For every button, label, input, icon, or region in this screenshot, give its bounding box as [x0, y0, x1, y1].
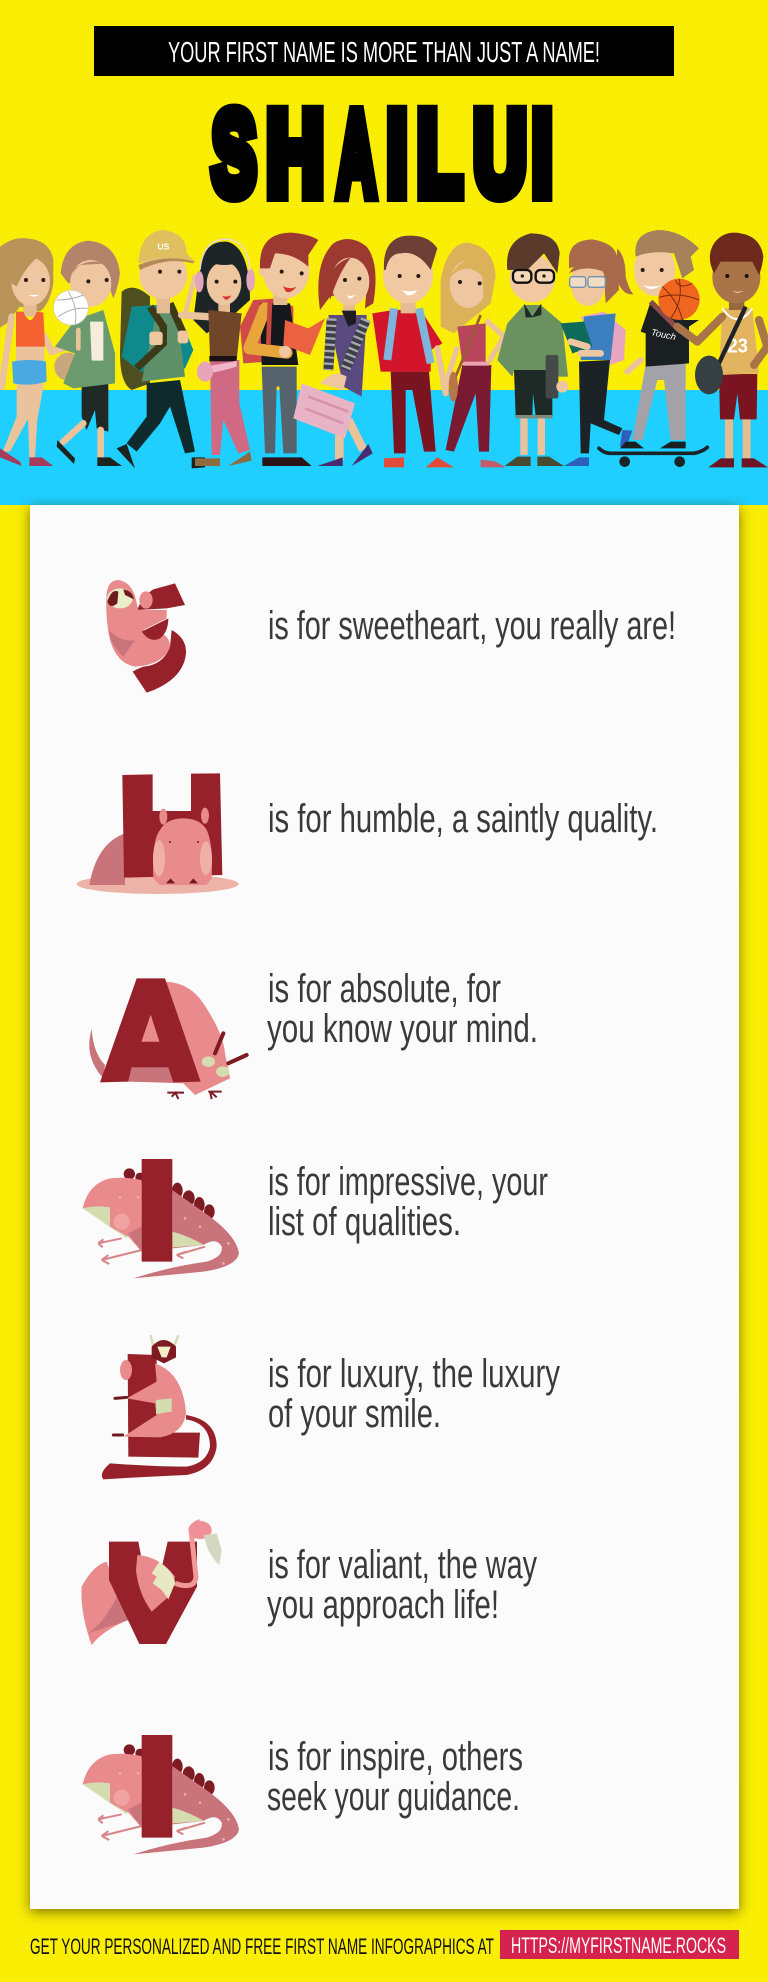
character: boy in red shirt — [372, 236, 454, 467]
icon: iguana on second letter I — [83, 1735, 239, 1854]
top banner — [94, 26, 674, 76]
group of characters, right half — [372, 230, 768, 467]
title: name: S — [212, 87, 256, 219]
text: second I lines: is for inspire, others — [268, 1735, 523, 1779]
character: skater with basketball — [599, 230, 707, 467]
character: girl with pink bag — [293, 239, 376, 466]
character: girl with pink backpack and tablet — [561, 239, 633, 466]
icon: sloth on letter S — [106, 580, 186, 693]
character: hiker with backpack and cap — [117, 230, 205, 468]
group of characters, left half — [0, 230, 376, 468]
text: L lines: is for luxury, the luxury — [268, 1352, 560, 1396]
panel: letter V row — [81, 1521, 537, 1645]
panel: second letter I row — [83, 1735, 523, 1854]
character: girl in orange top — [0, 238, 78, 466]
text: I lines: is for impressive, your — [268, 1160, 548, 1204]
text: L lines — [268, 1352, 560, 1436]
icon: armadillo on letter A — [89, 978, 247, 1099]
icon: hippo on letter H — [77, 773, 239, 894]
character: girl with volleyball and green jacket — [54, 241, 122, 466]
title: name: H — [267, 87, 324, 219]
title: name: L — [417, 87, 462, 219]
character: boy with basketball jersey and shoulder bag — [658, 233, 768, 467]
icon: flamingo on letter V — [81, 1521, 222, 1645]
text: second I lines: seek your guidance. — [267, 1775, 520, 1819]
panel: letter L row — [102, 1335, 560, 1479]
character: hiker with backpack and cap: US — [157, 241, 170, 251]
title: name — [212, 87, 552, 219]
title: name: I — [532, 87, 552, 219]
icon: monkey on letter L — [102, 1335, 217, 1479]
footer call to action: GET YOUR PERSONALIZED AND FREE FIRST NAME INFOGRAPHICS AT — [30, 1934, 494, 1959]
title: name: A — [337, 87, 376, 219]
text: V lines — [267, 1543, 537, 1627]
title: name: I — [387, 87, 407, 219]
icon: iguana on letter I — [83, 1159, 239, 1278]
character: blonde girl with maroon trousers — [441, 243, 506, 467]
character: boy with glasses and green sweater — [497, 233, 568, 466]
text: V lines: you approach life! — [267, 1583, 499, 1627]
title: name: U — [474, 87, 527, 219]
text: A lines: is for absolute, for — [268, 967, 501, 1011]
text: A lines: you know your mind. — [267, 1007, 538, 1051]
text: L lines: of your smile. — [268, 1392, 441, 1436]
character: skater with basketball: Touch — [650, 327, 677, 342]
character: boy reading red book — [240, 233, 325, 466]
panel: letter S row — [106, 580, 676, 693]
text: I lines: list of qualities. — [268, 1200, 461, 1244]
character: girl with black hair and headphones — [182, 239, 255, 466]
text: V lines: is for valiant, the way — [268, 1543, 537, 1587]
panel: letter A row — [89, 967, 538, 1099]
text: I lines — [268, 1160, 548, 1244]
character: boy with basketball jersey and shoulder bag: 23 — [727, 336, 748, 358]
text: second I lines — [267, 1735, 523, 1819]
text: A lines — [267, 967, 538, 1051]
panel: letter I row — [83, 1159, 548, 1278]
panel: letter H row — [77, 773, 658, 894]
